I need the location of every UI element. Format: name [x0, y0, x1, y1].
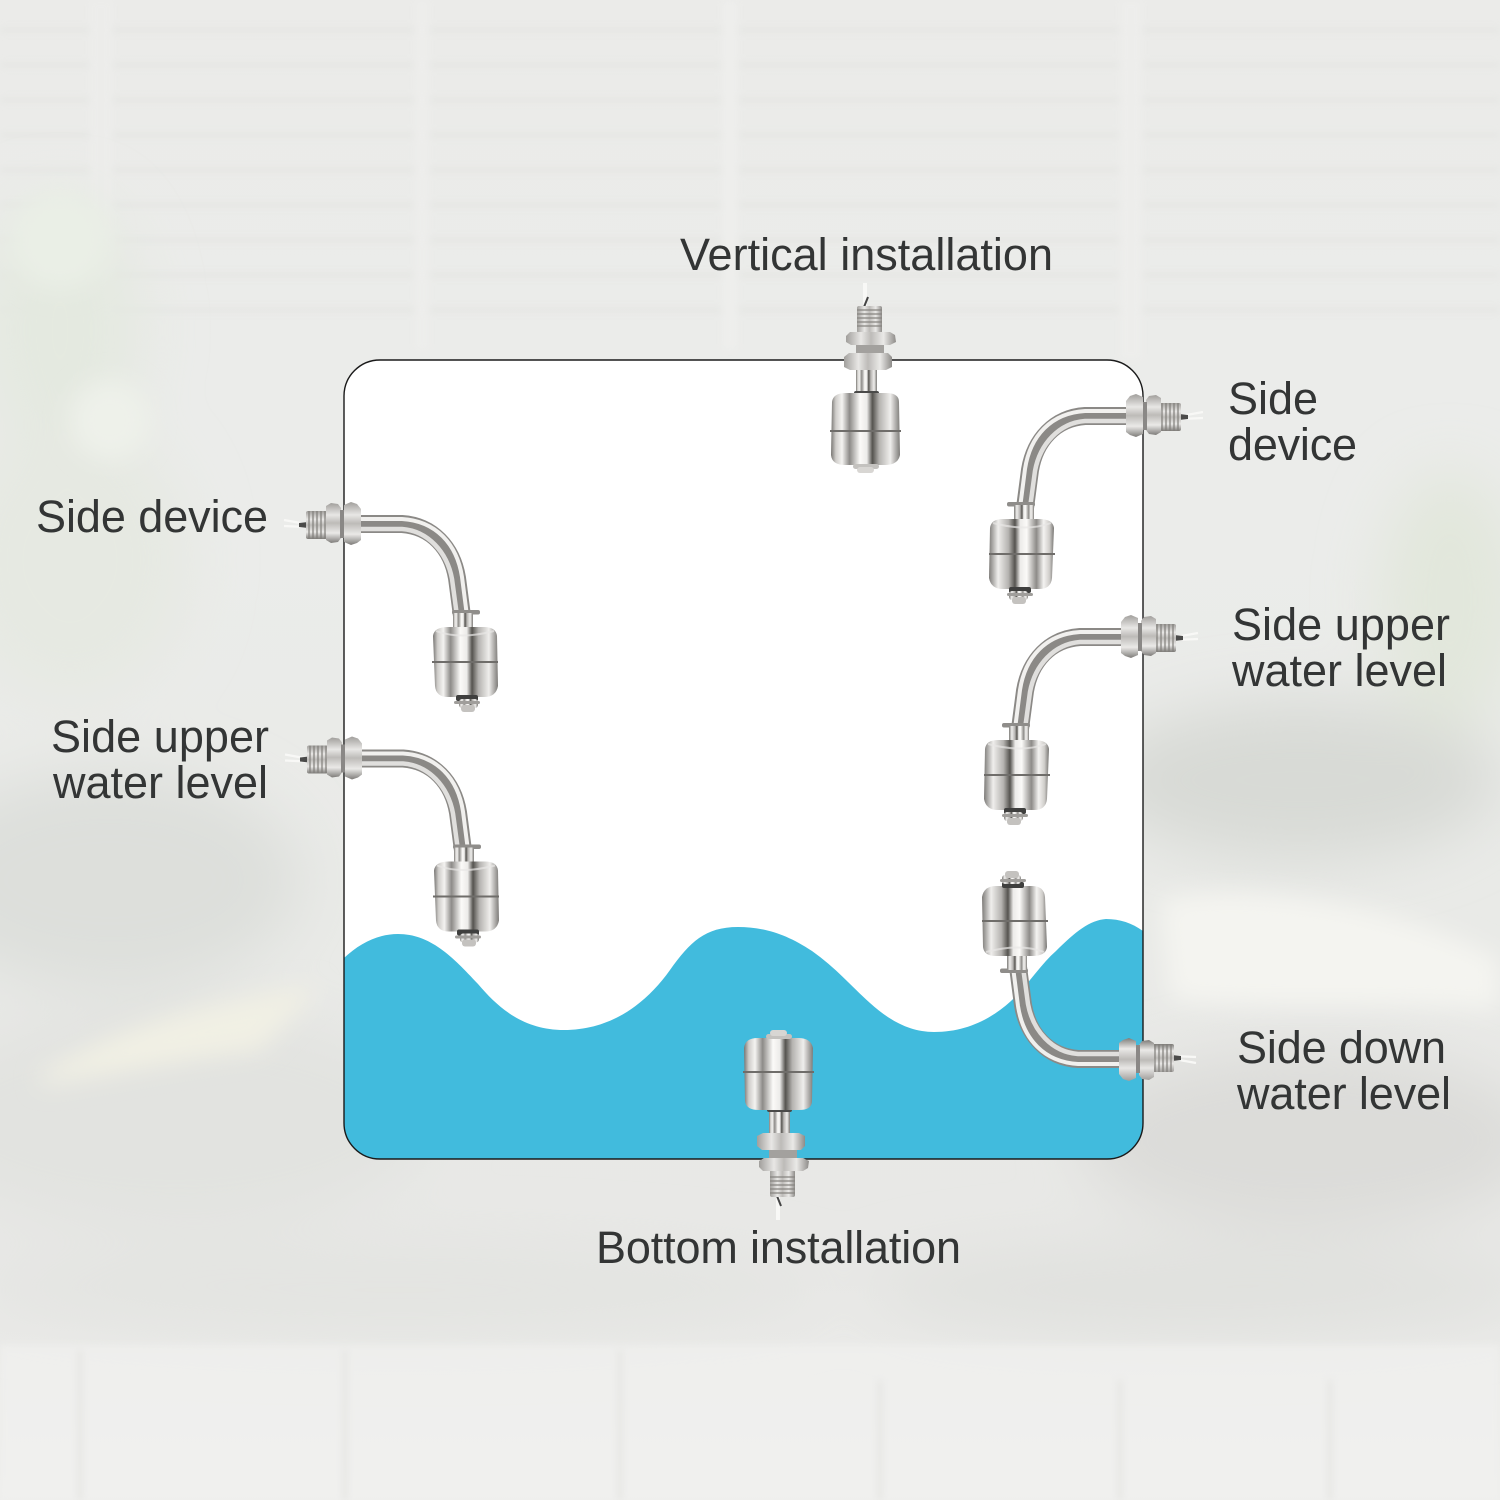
label: right side upper water level	[1231, 599, 1450, 696]
label: right side device: device	[1228, 419, 1357, 470]
sensor: right side device	[989, 394, 1203, 604]
sensor: right side upper water level	[984, 615, 1198, 825]
water wave	[344, 919, 1143, 1159]
label: vertical installation: Vertical installation	[680, 229, 1053, 280]
label: right side upper water level: water level	[1231, 645, 1447, 696]
label: side down water level: water level	[1236, 1068, 1451, 1119]
sensor: left side device	[284, 502, 498, 712]
label: right side upper water level: Side upper	[1232, 599, 1450, 650]
label: left side upper water level	[51, 711, 269, 808]
sensor: side down water level	[982, 871, 1196, 1081]
sensor: left side upper water level	[285, 736, 499, 946]
sensor: bottom installation	[743, 1030, 814, 1220]
background: decking boards	[0, 1345, 1500, 1500]
background: foliage highlights	[10, 190, 1500, 1085]
label: bottom installation: Bottom installation	[596, 1222, 961, 1273]
label: left side upper water level: water level	[52, 757, 268, 808]
tank panel	[344, 360, 1143, 1159]
tank outline	[344, 360, 1143, 1159]
background: fence posts and slats	[0, 0, 1500, 370]
label: left side device: Side device	[36, 491, 268, 542]
background: foliage	[0, 200, 1500, 1335]
label: right side device	[1228, 373, 1357, 470]
label: side down water level: Side down	[1237, 1022, 1446, 1073]
label: right side device: Side	[1228, 373, 1318, 424]
label: side down water level	[1236, 1022, 1451, 1119]
sensor: vertical installation	[830, 283, 901, 473]
label: left side upper water level: Side upper	[51, 711, 269, 762]
